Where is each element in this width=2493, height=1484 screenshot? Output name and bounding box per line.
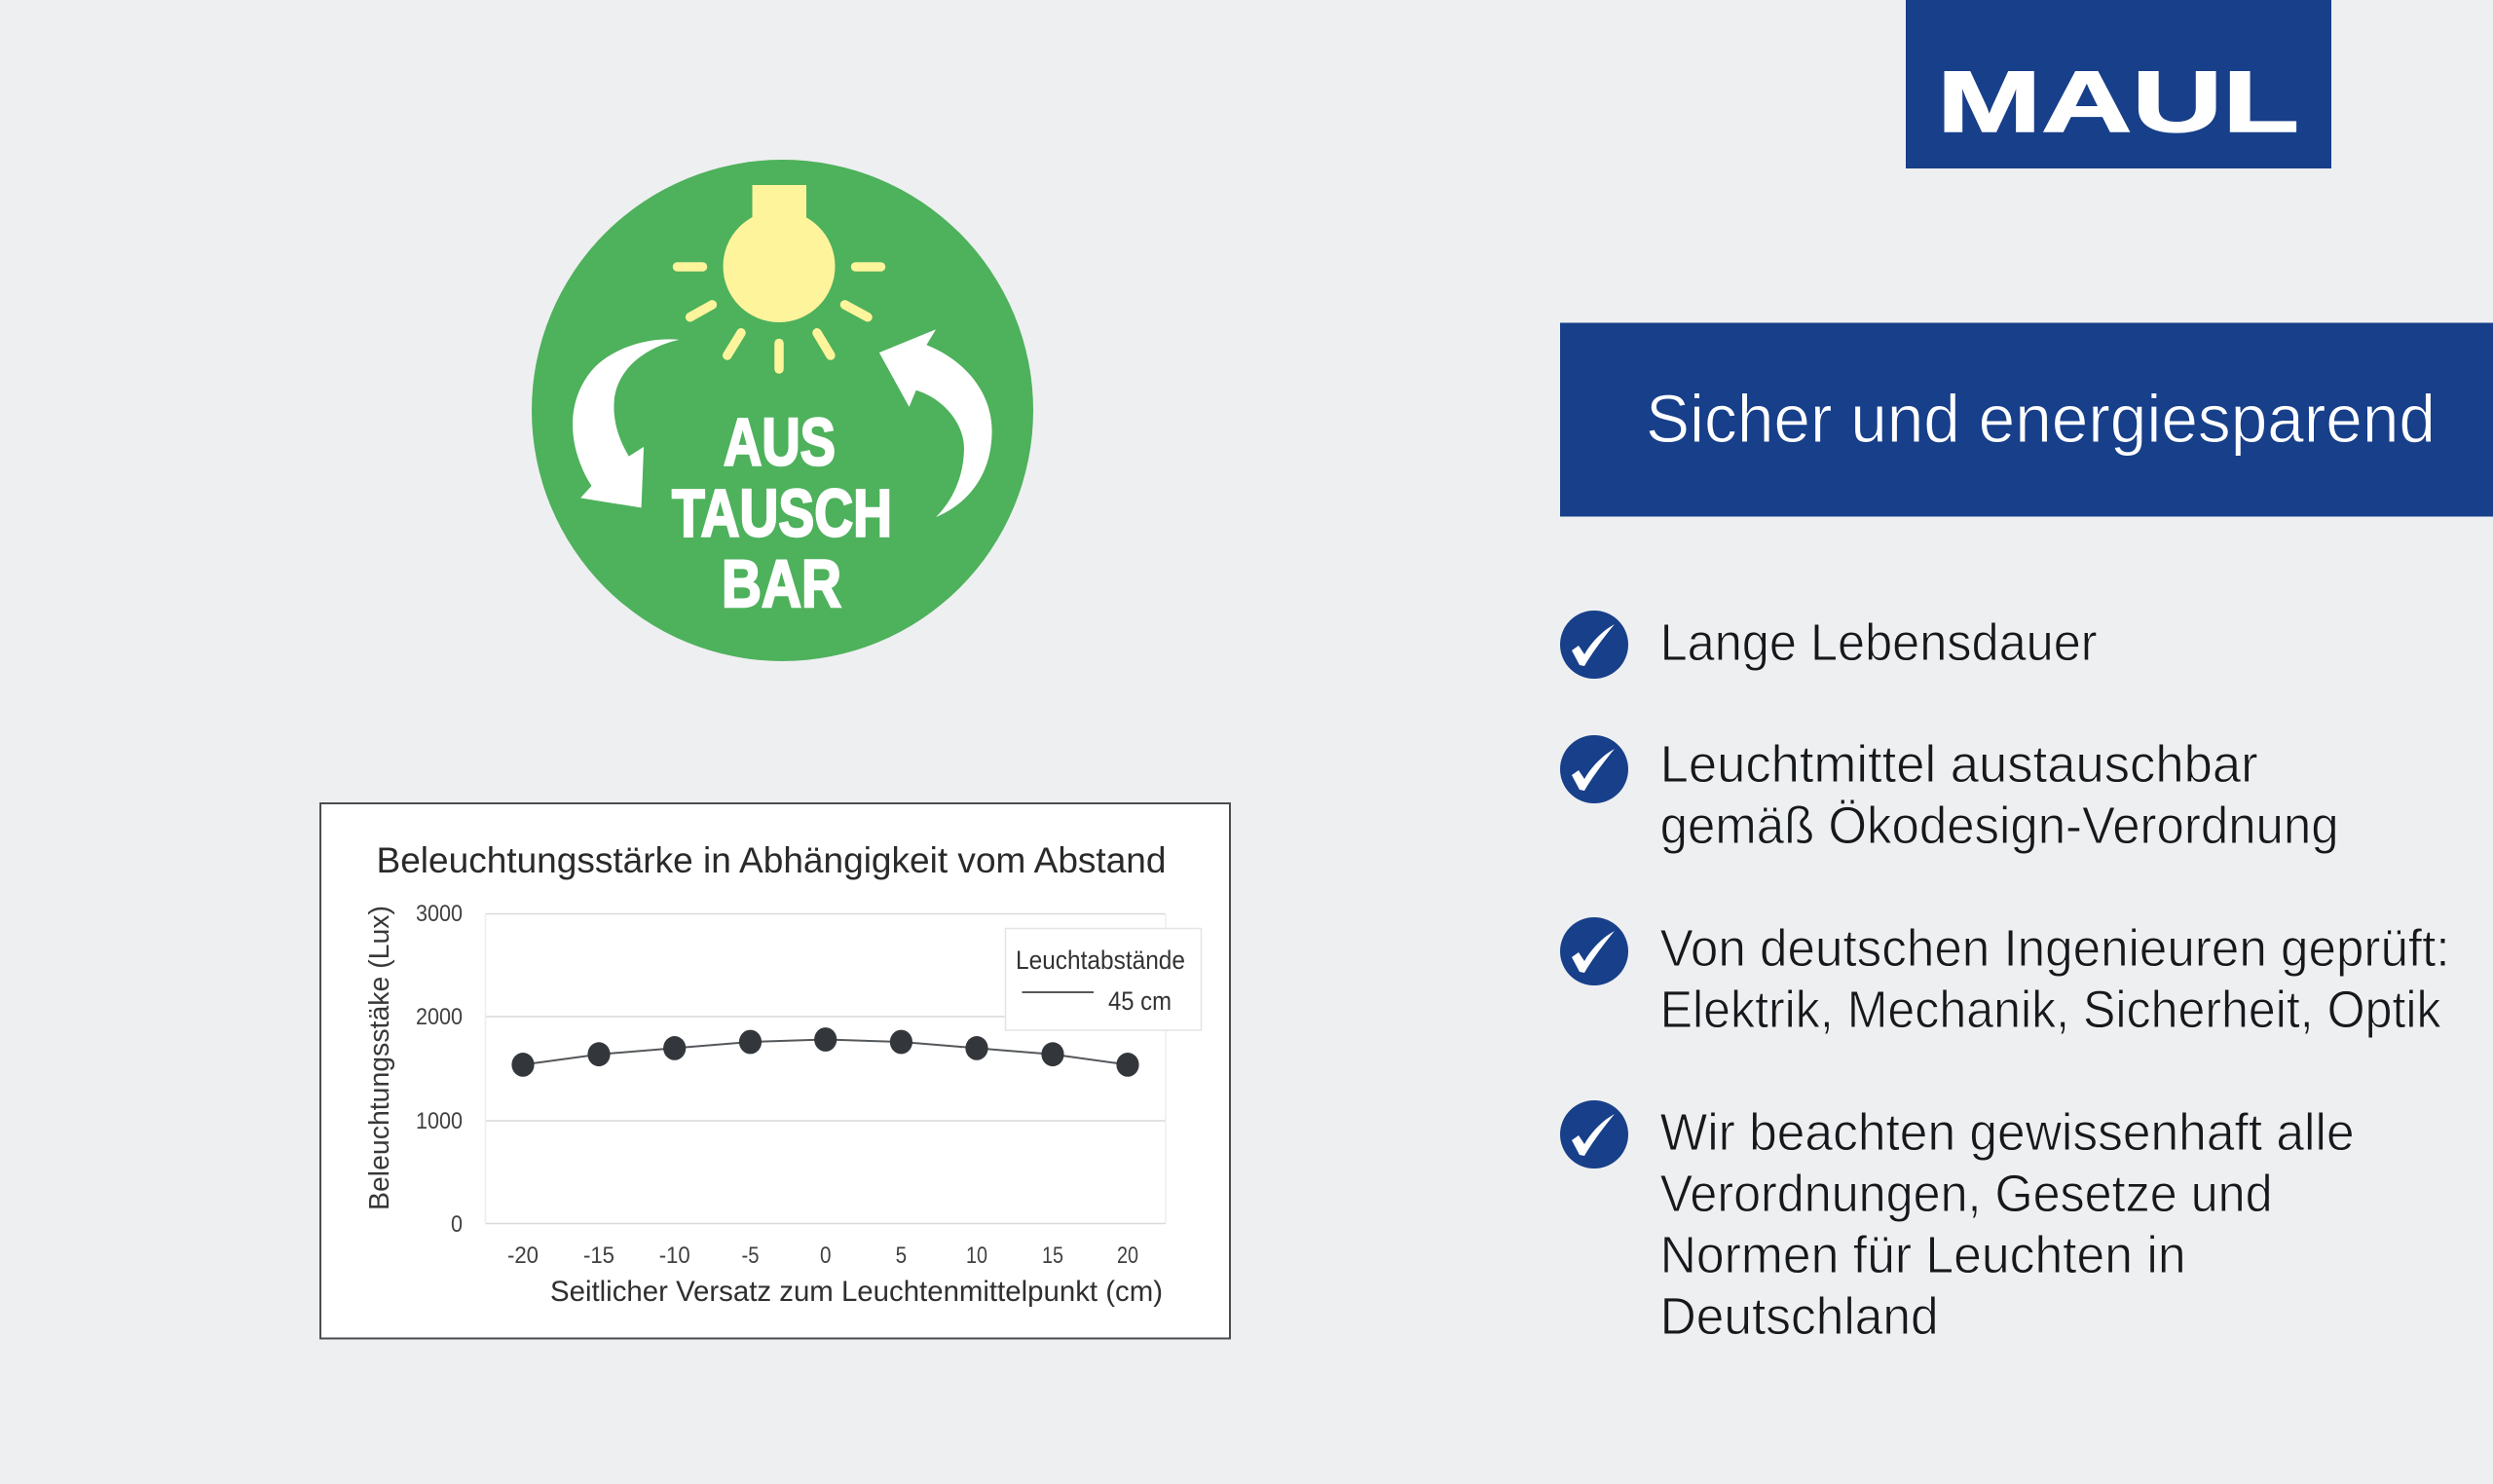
x axis ticks: 15 [1042, 1243, 1063, 1269]
badge text: AUS [724, 405, 836, 479]
icon: check [1560, 917, 1628, 985]
list item: Wir beachten gewissenhaft: Normen für Leuchten in [1660, 1227, 2186, 1284]
chart legend: Leuchtabstände [1016, 946, 1185, 975]
list item: Von deutschen Ingenieuren geprüft: Elektrik, Mechanik, Sicherheit, Optik [1660, 982, 2441, 1039]
x axis ticks: -20 [507, 1243, 539, 1269]
x axis ticks [507, 1243, 1138, 1269]
x axis ticks: 0 [820, 1243, 832, 1269]
banner heading [1560, 323, 2493, 516]
y axis ticks: 2000 [416, 1004, 463, 1030]
x axis ticks: 20 [1117, 1243, 1138, 1269]
list item: Wir beachten gewissenhaft: Wir beachten gewissenhaft alle [1660, 1104, 2355, 1162]
icon: check [1560, 1100, 1628, 1169]
y axis ticks: 1000 [416, 1108, 463, 1134]
list item: Leuchtmittel austauschbar: gemäß Ökodesign-Verordnung [1660, 798, 2339, 855]
badge text: BAR [722, 546, 841, 621]
list item: Von deutschen Ingenieuren geprüft [1560, 917, 2450, 1039]
x axis label: Seitlicher Versatz zum Leuchtenmittelpunkt (cm) [550, 1276, 1163, 1308]
y axis ticks: 3000 [416, 901, 463, 927]
list item: Wir beachten gewissenhaft [1560, 1100, 2355, 1346]
grid lines [485, 913, 1166, 1223]
icon: check [1560, 611, 1628, 679]
arrow: right, curving up [879, 329, 992, 517]
y axis ticks: 0 [451, 1211, 463, 1238]
badge: austauschbar [532, 160, 1033, 661]
list item: Wir beachten gewissenhaft: Deutschland [1660, 1288, 1939, 1346]
y axis label: Beleuchtungsstäke (Lux) [364, 906, 395, 1210]
banner heading: Sicher und energiesparend [1646, 381, 2436, 457]
data series: 45 cm [511, 1027, 1139, 1077]
chart title: Beleuchtungsstärke in Abhängigkeit vom Abstand [376, 840, 1167, 880]
x axis ticks: -5 [742, 1243, 760, 1269]
list item: Lange Lebensdauer [1560, 611, 2098, 679]
icon: check [1560, 735, 1628, 803]
y axis ticks [416, 901, 463, 1238]
icon: light bulb with rays [678, 185, 880, 369]
list item: Leuchtmittel austauschbar [1560, 735, 2339, 855]
list item: Lange Lebensdauer: Lange Lebensdauer [1660, 614, 2098, 672]
chart legend [1005, 929, 1202, 1030]
x axis ticks: -10 [659, 1243, 690, 1269]
badge text [672, 405, 892, 621]
x axis ticks: -15 [583, 1243, 614, 1269]
arrow: left, curving down [573, 339, 679, 507]
list item: Leuchtmittel austauschbar: Leuchtmittel austauschbar [1660, 736, 2258, 794]
x axis ticks: 10 [966, 1243, 987, 1269]
panel: line chart [320, 803, 1230, 1338]
list item: Von deutschen Ingenieuren geprüft: Von deutschen Ingenieuren geprüft: [1660, 920, 2450, 978]
logo: MAUL [1906, 0, 2331, 168]
chart legend: 45 cm [1108, 986, 1172, 1016]
logo: MAUL: MAUL [1937, 53, 2299, 150]
badge text: TAUSCH [672, 475, 892, 551]
list item: Wir beachten gewissenhaft: Verordnungen, Gesetze und [1660, 1166, 2273, 1223]
x axis ticks: 5 [896, 1243, 907, 1269]
